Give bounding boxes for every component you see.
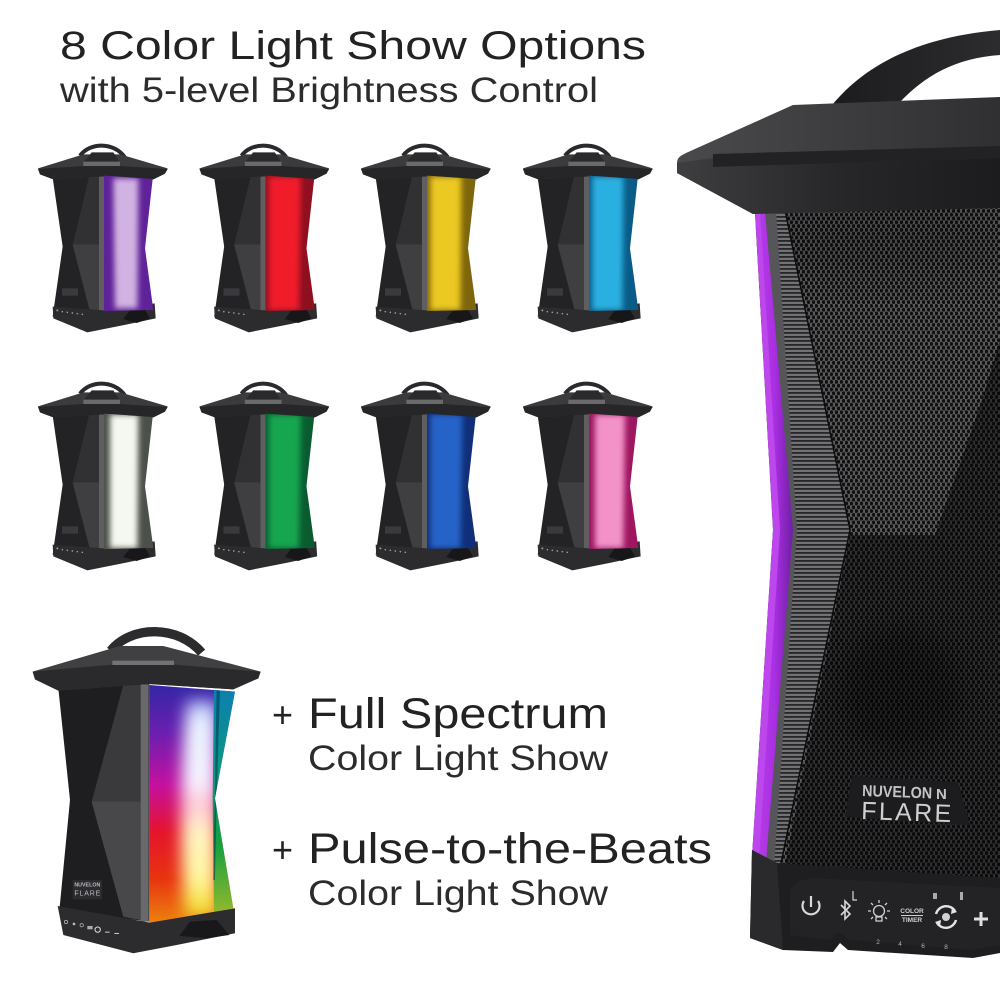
control panel <box>790 878 1000 950</box>
color timer label <box>900 908 924 924</box>
icon: bluetooth <box>841 891 857 919</box>
speaker: pink <box>523 384 653 570</box>
brand badge <box>845 776 970 828</box>
brand badge: NUVELON <box>862 783 932 802</box>
speaker: white <box>38 384 168 570</box>
icon: light bulb <box>868 900 890 921</box>
speaker: blue <box>361 384 491 570</box>
feature: full spectrum: Color Light Show <box>308 739 609 778</box>
feature: pulse to the beats: + <box>272 829 293 870</box>
feature: full spectrum <box>272 690 609 778</box>
feature: pulse to the beats: Color Light Show <box>308 874 609 913</box>
feature: full spectrum: + <box>272 694 293 735</box>
speaker: purple <box>38 146 168 332</box>
icon: mode dial <box>933 892 963 928</box>
timer numbers: 4 <box>898 941 902 948</box>
speaker: green <box>199 384 329 570</box>
color timer label: TIMER <box>902 917 922 924</box>
color timer label: COLOR <box>900 908 924 915</box>
timer numbers: 8 <box>944 944 948 951</box>
speaker: full spectrum <box>33 632 261 953</box>
feature: pulse to the beats: Pulse-to-the-Beats <box>308 825 712 873</box>
large speaker close-up <box>677 30 1000 958</box>
speaker: full spectrum: FLARE <box>74 890 101 897</box>
gray trim <box>765 214 797 862</box>
speaker: red <box>199 146 329 332</box>
roof <box>677 97 1000 214</box>
base <box>750 850 1000 958</box>
speaker grille <box>750 200 1000 895</box>
brand badge: N <box>936 786 947 803</box>
title: 8 Color Light Show Options <box>60 24 646 68</box>
icon: power <box>803 896 820 914</box>
louvered side grille <box>774 213 850 864</box>
timer numbers <box>876 939 948 951</box>
timer numbers: 6 <box>921 943 925 950</box>
speaker: cyan blue <box>523 146 653 332</box>
speaker: yellow <box>361 146 491 332</box>
brand badge: FLARE <box>861 797 952 828</box>
feature: full spectrum: Full Spectrum <box>308 690 608 738</box>
subtitle: with 5-level Brightness Control <box>59 71 598 110</box>
icon: plus <box>974 912 988 926</box>
purple light strip <box>752 212 793 862</box>
speaker: full spectrum: NUVELON <box>74 883 100 889</box>
feature: pulse to the beats <box>272 825 712 913</box>
handle <box>833 30 1000 104</box>
timer numbers: 2 <box>876 939 880 946</box>
